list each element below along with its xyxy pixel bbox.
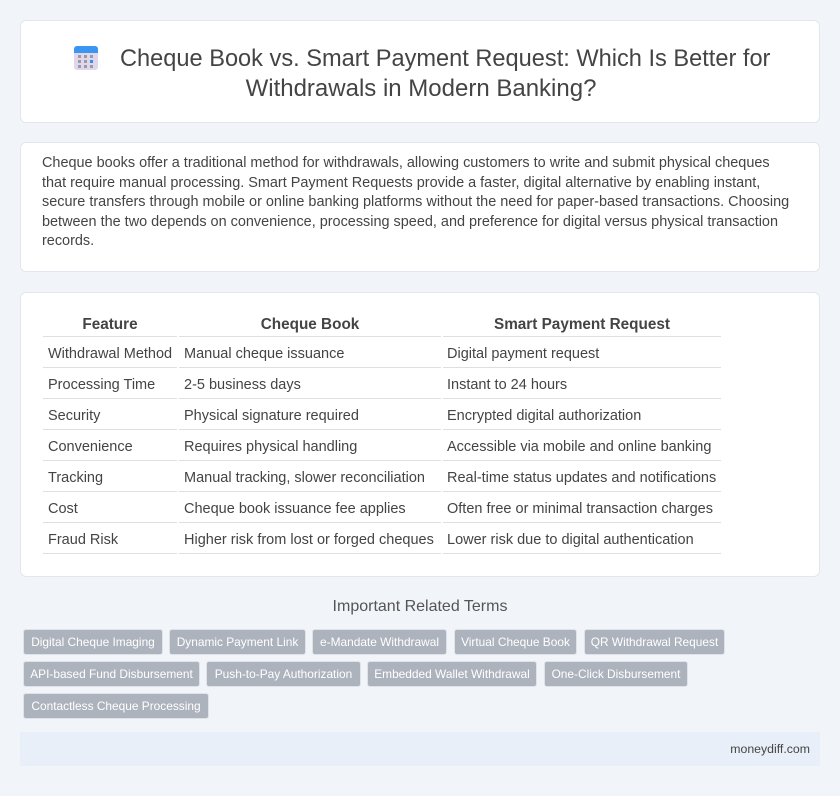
row: tracking: Tracking: [48, 470, 103, 486]
table header: [82, 316, 670, 333]
table header: Feature: [82, 316, 138, 333]
related terms tags: Virtual Cheque Book: [461, 635, 570, 649]
related terms tags: Contactless Cheque Processing: [31, 699, 201, 713]
row: processing time: Processing Time: [48, 377, 155, 393]
row: convenience: [48, 439, 711, 455]
row: cost: Cost: [48, 501, 78, 517]
row: convenience: Accessible via mobile and online banking: [447, 439, 711, 455]
row: fraud risk: Higher risk from lost or forged cheques: [184, 532, 434, 548]
row: processing time: Instant to 24 hours: [447, 377, 567, 393]
row: tracking: Manual tracking, slower reconciliation: [184, 470, 425, 486]
summary text: records.: [42, 233, 94, 249]
title: Cheque Book vs. Smart Payment Request: Which Is Better for: [120, 46, 770, 72]
title: Withdrawals in Modern Banking?: [246, 75, 596, 102]
row: security: [48, 408, 641, 424]
row: processing time: 2-5 business days: [184, 377, 301, 393]
summary text: [42, 155, 789, 249]
comparison table: [43, 316, 721, 554]
row: fraud risk: Fraud Risk: [48, 532, 118, 548]
summary panel: [20, 142, 820, 272]
row: fraud risk: Lower risk due to digital authentication: [447, 532, 694, 548]
icon: calendar: [74, 46, 98, 70]
row: tracking: [48, 470, 716, 486]
related terms heading: Important Related Terms: [333, 598, 507, 615]
row: withdrawal method: Digital payment request: [447, 346, 599, 362]
comparison table panel: [20, 292, 820, 577]
table header: Smart Payment Request: [494, 316, 670, 333]
row: convenience: Requires physical handling: [184, 439, 357, 455]
title: [120, 46, 770, 102]
row: security: Security: [48, 408, 100, 424]
table header: Cheque Book: [261, 316, 359, 333]
row: tracking: Real-time status updates and notifications: [447, 470, 716, 486]
row: security: Physical signature required: [184, 408, 359, 424]
summary text: secure transfers through mobile or online banking platforms without the need for paper-based transactions. Choosing: [42, 194, 789, 210]
row: cost: Cheque book issuance fee applies: [184, 501, 406, 517]
related terms tags: Push-to-Pay Authorization: [215, 667, 352, 681]
related terms tags: API-based Fund Disbursement: [30, 667, 193, 681]
footer: [20, 732, 820, 766]
summary text: that require manual processing. Smart Payment Requests provide a faster, digital alternative by enabling instant,: [42, 175, 760, 191]
row: cost: [48, 501, 713, 517]
related terms tags: One-Click Disbursement: [552, 667, 680, 681]
row: cost: Often free or minimal transaction charges: [447, 501, 713, 517]
source label: moneydiff.com: [730, 742, 810, 756]
summary text: between the two depends on convenience, processing speed, and preference for digital versus physical transaction: [42, 214, 778, 230]
row: fraud risk: [48, 532, 694, 548]
related terms tags: [23, 629, 725, 719]
row: withdrawal method: Manual cheque issuance: [184, 346, 344, 362]
row: security: Encrypted digital authorization: [447, 408, 641, 424]
summary text: Cheque books offer a traditional method for withdrawals, allowing customers to write and submit physical cheques: [42, 155, 770, 171]
row: processing time: [48, 377, 567, 393]
title panel: [20, 20, 820, 123]
related terms tags: Embedded Wallet Withdrawal: [374, 667, 530, 681]
related terms tags: Dynamic Payment Link: [177, 635, 298, 649]
related terms tags: QR Withdrawal Request: [591, 635, 718, 649]
related terms tags: e-Mandate Withdrawal: [320, 635, 439, 649]
row: withdrawal method: Withdrawal Method: [48, 346, 172, 362]
row: withdrawal method: [48, 346, 600, 362]
related terms tags: Digital Cheque Imaging: [31, 635, 155, 649]
row: convenience: Convenience: [48, 439, 133, 455]
